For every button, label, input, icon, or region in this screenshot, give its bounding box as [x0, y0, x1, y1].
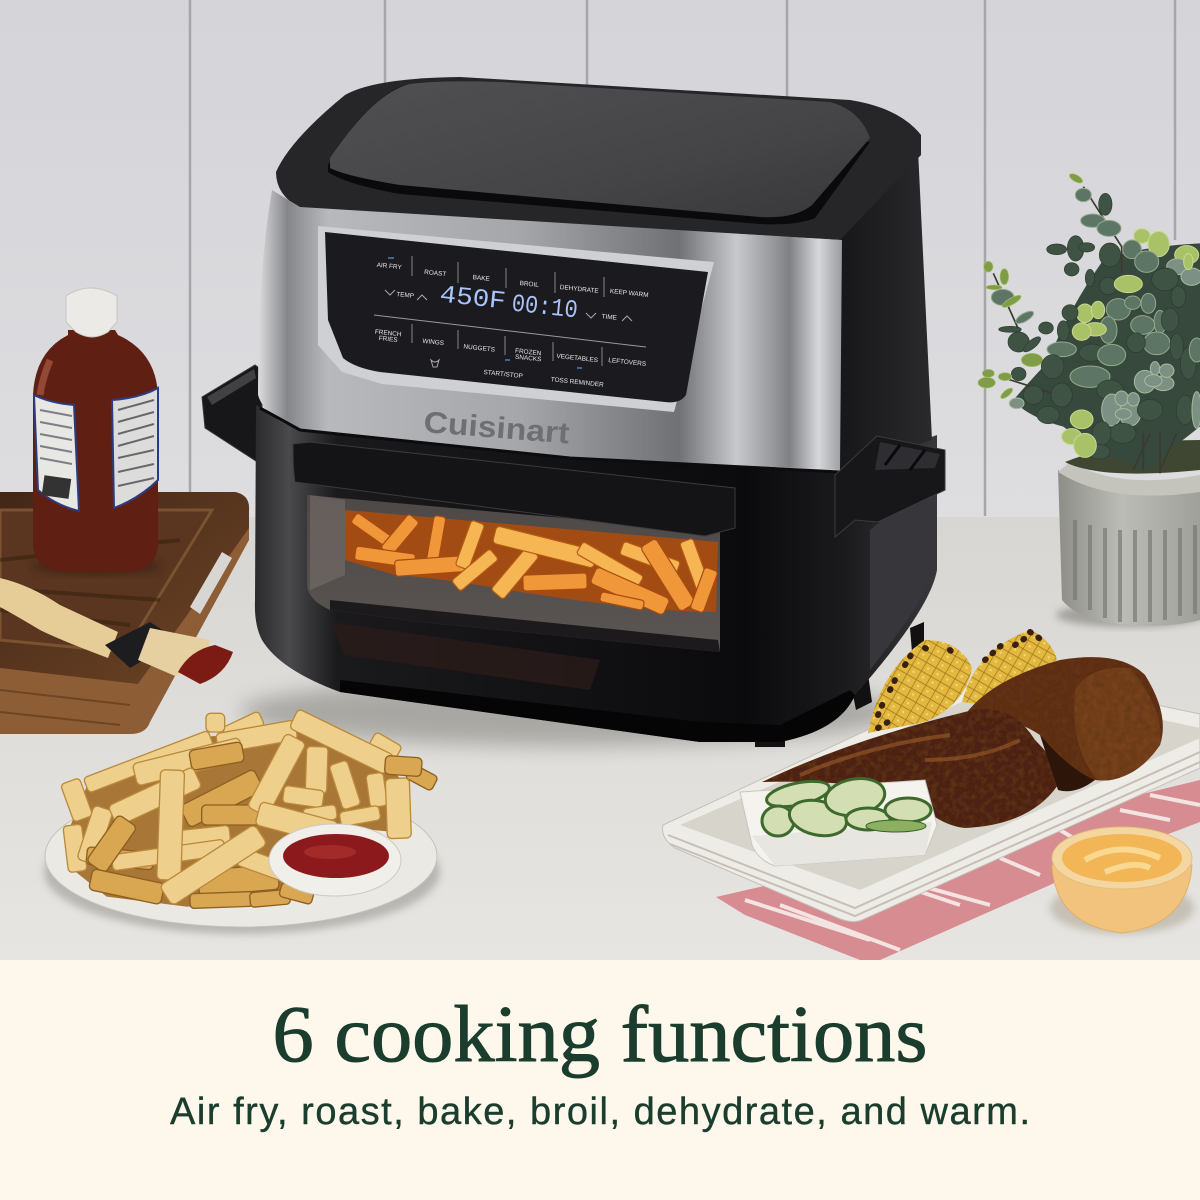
corn: [868, 630, 1057, 733]
door handle: [293, 442, 735, 536]
panel labels: FROZEN: [515, 348, 542, 357]
base strip: [340, 680, 855, 742]
ketchup cup: [269, 824, 401, 896]
platter: [662, 672, 1200, 922]
window: [307, 495, 720, 652]
lid shadow line: [328, 84, 870, 224]
subheading: Air fry, roast, bake, broil, dehydrate, and warm.: [170, 1091, 1030, 1133]
time readout: 00:10: [510, 290, 579, 325]
potted plant: [978, 172, 1200, 473]
basting brush: [0, 578, 233, 684]
top shell: [276, 77, 921, 240]
counter top: [0, 517, 1200, 960]
lower window reflection: [330, 622, 600, 690]
bottle cap: [66, 288, 117, 337]
air fryer shadow: [240, 678, 900, 746]
lid: [330, 81, 870, 217]
upper side: [840, 150, 932, 472]
air fryer: [202, 77, 945, 747]
panel labels: KEEP WARM: [610, 288, 649, 299]
panel labels: FRENCH: [375, 329, 402, 338]
Cuisinart logo: Cuisinart: [422, 406, 571, 450]
bottle label right: [112, 388, 158, 508]
panel labels: BAKE: [472, 274, 490, 283]
side handle right: [835, 436, 945, 537]
panel labels: TOSS REMINDER: [550, 376, 604, 389]
corn cob left: [868, 640, 972, 733]
feet: [755, 622, 924, 747]
panel labels: DEHYDRATE: [559, 284, 599, 295]
panel labels: ROAST: [424, 269, 447, 278]
caption band: [0, 960, 1200, 1200]
stainless band: [258, 190, 842, 470]
panel labels: [375, 262, 649, 389]
side handle left: [202, 365, 262, 465]
corn cob right: [962, 630, 1057, 705]
panel labels: BROIL: [519, 280, 539, 289]
panel labels: AIR FRY: [376, 262, 403, 271]
control panel frame: [318, 226, 714, 412]
body right reflection: [870, 480, 935, 670]
control panel: [325, 232, 708, 402]
plant pot: [1056, 440, 1200, 627]
cutting board: [0, 492, 249, 734]
panel labels: TEMP: [396, 291, 414, 300]
bottle label left: [34, 395, 79, 511]
pickles: [762, 774, 931, 841]
seam: [260, 408, 840, 472]
panel labels: NUGGETS: [463, 343, 495, 354]
panel labels: VEGETABLES: [556, 353, 598, 364]
panel labels: SNACKS: [515, 354, 542, 363]
wall background: [0, 0, 1200, 530]
panel labels: START/STOP: [483, 369, 523, 380]
pickle dish: [740, 774, 937, 866]
grilled chicken: [762, 657, 1163, 828]
panel labels: WINGS: [422, 338, 444, 347]
panel labels: LEFTOVERS: [608, 357, 646, 368]
heading: 6 cooking functions: [272, 991, 927, 1079]
sweet potato fries: [351, 512, 718, 615]
sauce bottle: [33, 288, 161, 575]
panel labels: TIME: [601, 313, 617, 322]
temperature readout: 450F: [438, 281, 507, 316]
dip bowl: [1050, 827, 1194, 934]
pink towel: [716, 780, 1200, 960]
fries plate: [44, 709, 440, 934]
lower body: [255, 405, 937, 742]
panel labels: FRIES: [378, 335, 398, 344]
fries: [60, 709, 438, 908]
